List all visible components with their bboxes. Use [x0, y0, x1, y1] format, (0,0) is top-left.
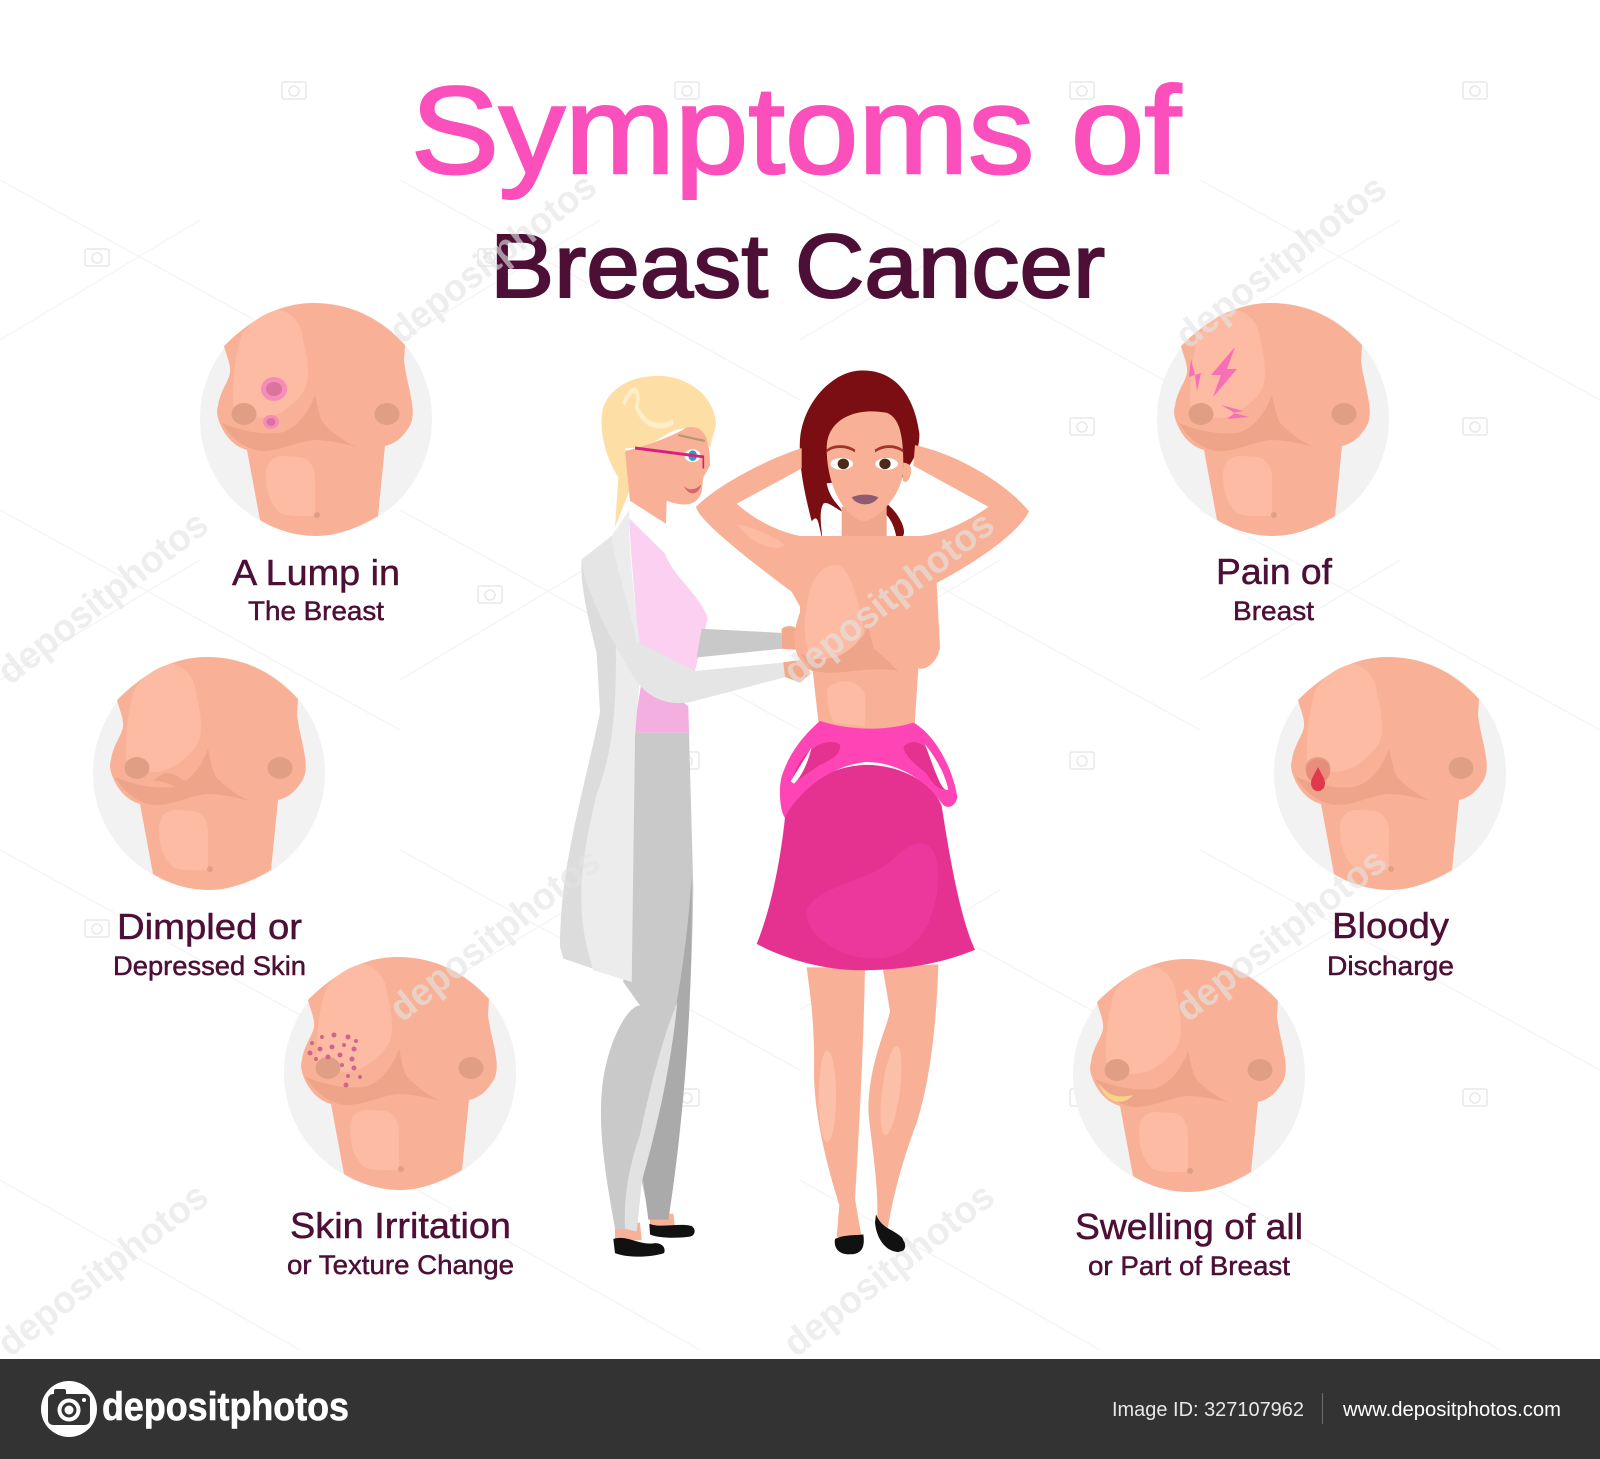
- watermark text overlay: depositphotos: [776, 1175, 1002, 1365]
- panel: dimpled or depressed skin: [93, 657, 325, 981]
- doctor figure: [560, 376, 810, 1257]
- torso icon with swelling: [1073, 959, 1305, 1192]
- sublabel: The Breast: [248, 596, 385, 626]
- label: Swelling of all: [1075, 1206, 1303, 1247]
- footer bar: [0, 1359, 1600, 1459]
- sublabel: Breast: [1233, 596, 1315, 626]
- website: www.depositphotos.com: [1342, 1399, 1561, 1421]
- panel: bloody discharge: [1274, 657, 1506, 981]
- sublabel: or Part of Breast: [1088, 1251, 1290, 1281]
- label: Bloody: [1332, 905, 1449, 946]
- sublabel: or Texture Change: [287, 1250, 514, 1280]
- watermark text overlay: depositphotos: [382, 840, 608, 1030]
- label: A Lump in: [232, 552, 400, 593]
- watermark text overlay: depositphotos: [1168, 167, 1394, 357]
- patient figure: [696, 370, 1029, 1254]
- panel: pain of breast: [1157, 303, 1389, 626]
- sublabel: Depressed Skin: [113, 951, 306, 981]
- label: Skin Irritation: [290, 1205, 511, 1246]
- label: Dimpled or: [117, 906, 302, 947]
- logo wordmark: depositphotos: [102, 1385, 349, 1429]
- torso icon with lumps: [200, 303, 432, 536]
- watermark text overlay: depositphotos: [776, 503, 1002, 693]
- torso icon with irritated skin: [284, 957, 516, 1190]
- panel: swelling: [1073, 959, 1305, 1281]
- image id: Image ID: 327107962: [1112, 1399, 1304, 1421]
- title: [411, 62, 1182, 317]
- title line 1: Symptoms of: [411, 62, 1182, 200]
- title line 2: Breast Cancer: [490, 217, 1105, 317]
- torso icon with discharge drop: [1274, 657, 1506, 890]
- watermark text overlay: [0, 165, 1394, 1365]
- torso icon with pain bolts: [1157, 303, 1389, 536]
- panel: a lump in the breast: [200, 303, 432, 626]
- central illustration: doctor examining patient: [560, 370, 1029, 1257]
- torso icon with dimple: [93, 657, 325, 890]
- sublabel: Discharge: [1327, 951, 1454, 981]
- icon: camera logo: [41, 1381, 97, 1437]
- label: Pain of: [1216, 551, 1333, 592]
- panel: skin irritation: [284, 957, 516, 1280]
- watermark text overlay: depositphotos: [1168, 840, 1394, 1030]
- watermark text overlay: depositphotos: [382, 165, 605, 352]
